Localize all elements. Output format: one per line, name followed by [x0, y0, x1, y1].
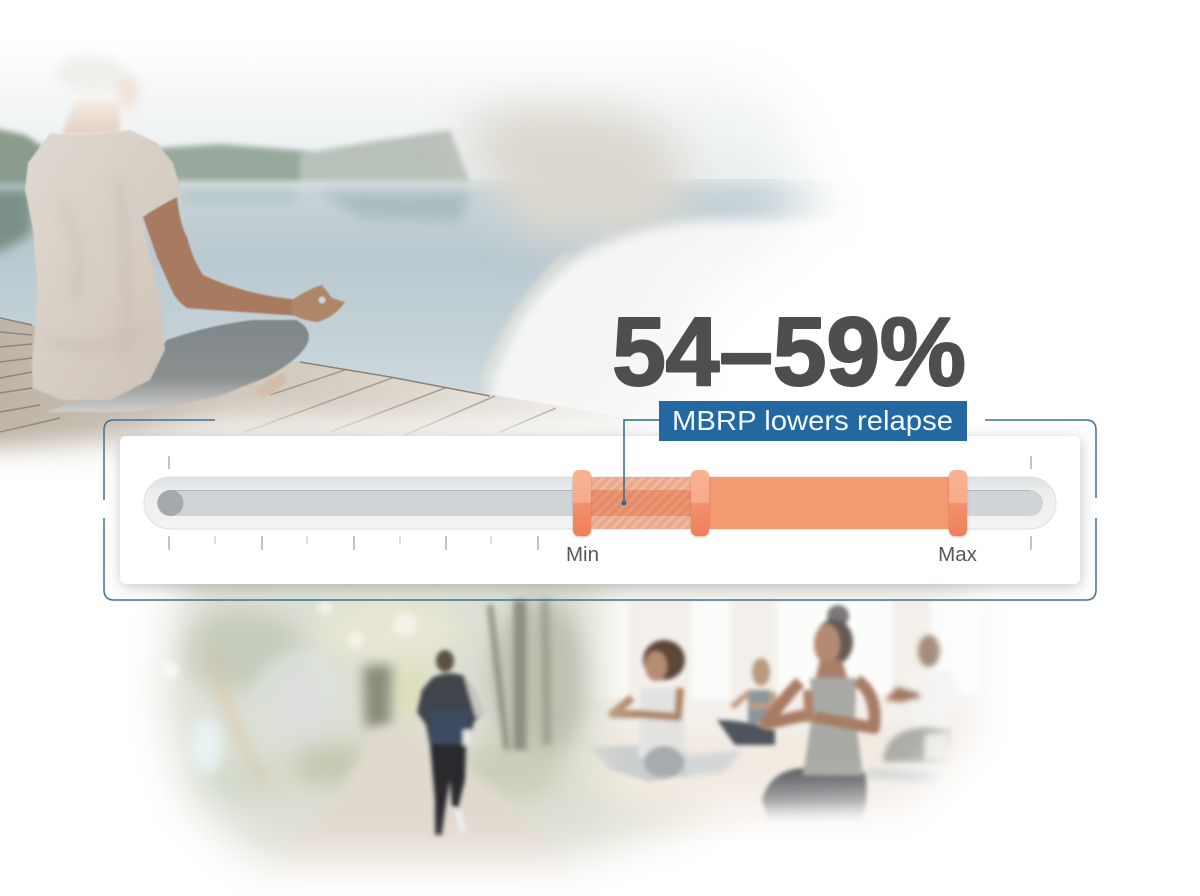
arm	[143, 197, 345, 322]
photo: runner on forest path	[149, 584, 692, 880]
sky	[0, 87, 807, 179]
dirt path	[342, 722, 503, 810]
yoga mats	[680, 750, 940, 785]
wooden dock	[0, 317, 608, 465]
callout label	[659, 401, 967, 441]
label: max: Max	[938, 543, 978, 566]
student left	[590, 640, 688, 782]
tick marks	[169, 456, 1031, 550]
leg	[47, 320, 309, 412]
solid range	[706, 477, 952, 529]
handle: min	[573, 470, 591, 536]
hair and head	[56, 56, 139, 110]
treeline	[0, 125, 470, 184]
foot	[255, 373, 287, 398]
photo: meditating person on lake dock	[0, 54, 832, 465]
windows	[578, 600, 980, 700]
student centre	[762, 605, 875, 825]
blossom highlights	[162, 601, 417, 678]
dark thicket	[363, 665, 392, 728]
water	[0, 179, 832, 395]
neck	[62, 100, 120, 135]
light arc	[485, 255, 568, 380]
headline statistic: 54–59%	[612, 297, 966, 406]
panel: gauge card	[120, 436, 1080, 584]
hatched range	[590, 477, 694, 529]
forest background	[149, 584, 692, 872]
student back	[717, 658, 776, 745]
shirt	[25, 130, 182, 400]
handle: middle	[691, 470, 709, 536]
student right	[883, 635, 963, 762]
floor	[540, 725, 1010, 840]
foliage	[175, 598, 590, 802]
bracket frame around gauge	[104, 420, 1096, 600]
far trees and reflection in warm haze	[460, 105, 680, 240]
label: min: Min	[566, 543, 599, 566]
studio wall	[580, 584, 979, 736]
rainbow flare	[190, 654, 266, 781]
callout label: MBRP lowers relapse	[672, 405, 953, 436]
photo: group yoga class in bright studio	[578, 584, 979, 828]
card surface	[120, 436, 1080, 584]
pale haze beyond light arc	[490, 220, 850, 440]
runner	[417, 650, 484, 835]
person	[25, 56, 345, 412]
handle: max	[949, 470, 967, 536]
callout connector	[622, 420, 660, 506]
gauge track	[144, 477, 1056, 529]
tree trunks	[490, 600, 547, 750]
start knob	[158, 490, 184, 516]
